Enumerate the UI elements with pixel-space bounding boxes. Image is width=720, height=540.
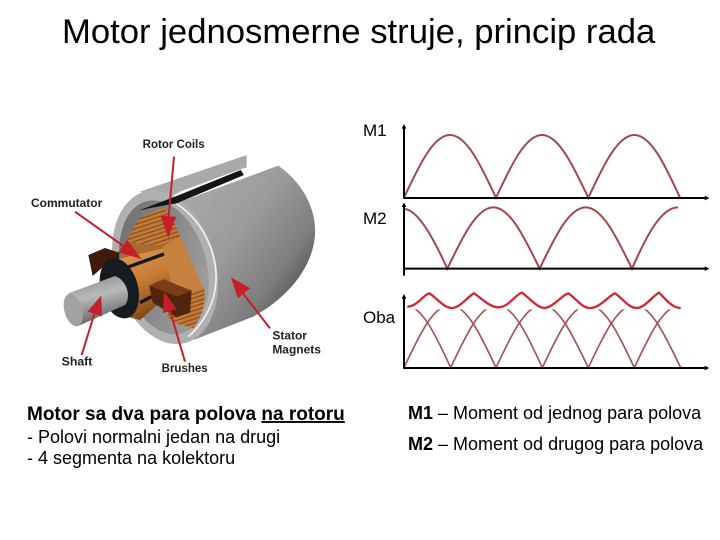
dark gap behind the shell: [138, 170, 244, 211]
chart: M1: [402, 124, 709, 200]
commutator slots: [127, 254, 164, 303]
legend: M2: M2 – Moment od drugog para polova: [408, 434, 704, 454]
white edge of stator: [176, 203, 216, 337]
arrow: rotor coils: [162, 157, 175, 235]
M1 axes: [403, 127, 705, 198]
rear brush: [88, 248, 119, 276]
label: Stator Magnets: Stator: [272, 328, 307, 342]
label: Shaft: Shaft: [62, 355, 92, 369]
stator inner surface: [105, 190, 223, 344]
title: Motor jednosmerne struje, princip rada: [62, 13, 656, 51]
shaft: [60, 276, 128, 328]
arrow: shaft: [82, 298, 101, 355]
stator rear shell strip: [140, 155, 247, 203]
stator body: [176, 166, 315, 340]
M2 curve: [404, 207, 678, 269]
shaft end: [60, 292, 86, 328]
text block: legend: [408, 403, 704, 454]
rotor coils: lower winding: [167, 288, 205, 328]
label: M1: M1: [363, 121, 387, 140]
heading: motor with two pole pairs: Motor sa dva para polova na rotoru: [27, 404, 345, 425]
legend: M1: M1 – Moment od jednog para polova: [408, 403, 702, 423]
front brush: [149, 279, 192, 317]
individual moment curves: [404, 305, 681, 368]
rotor core: centre fill: [120, 237, 180, 277]
arrow: stator magnets: [233, 279, 270, 328]
black insulating collar: [93, 254, 145, 323]
label: Commutator: Commutator: [31, 196, 103, 210]
Oba axis arrowheads: [402, 294, 709, 370]
commutator: [107, 248, 170, 320]
brush top face: [149, 279, 192, 297]
rotor coils: upper winding: [127, 207, 180, 245]
chart: Oba (both combined): [402, 293, 709, 370]
M1 curve: [404, 135, 680, 198]
arrow: brushes: [164, 295, 185, 362]
label: Brushes: Brushes: [162, 361, 208, 375]
rotor core: right segment: [163, 237, 204, 300]
chart: M2: [402, 202, 709, 276]
summed moment curve: [407, 293, 681, 308]
illustration: DC motor cutaway: [31, 137, 321, 375]
label: Oba: Oba: [363, 308, 396, 327]
arrow: commutator: [75, 212, 139, 257]
text block: rotor description: [27, 404, 345, 468]
stator front ring: [96, 179, 234, 356]
bullet: commutator segments: - 4 segmenta na kolektoru: [27, 448, 235, 468]
label: Rotor Coils: Rotor Coils: [143, 137, 205, 151]
M2 axis arrowheads: [402, 202, 709, 271]
bullet: poles: - Polovi normalni jedan na drugi: [27, 427, 280, 447]
shaft cylinder: [68, 276, 128, 326]
brush side face: [149, 279, 192, 317]
M2 axes: [403, 206, 705, 276]
label: M2: M2: [363, 209, 387, 228]
label: Stator Magnets: Magnets: [272, 343, 321, 357]
Oba axes: [403, 297, 705, 368]
M1 axis arrowheads: [402, 124, 709, 200]
